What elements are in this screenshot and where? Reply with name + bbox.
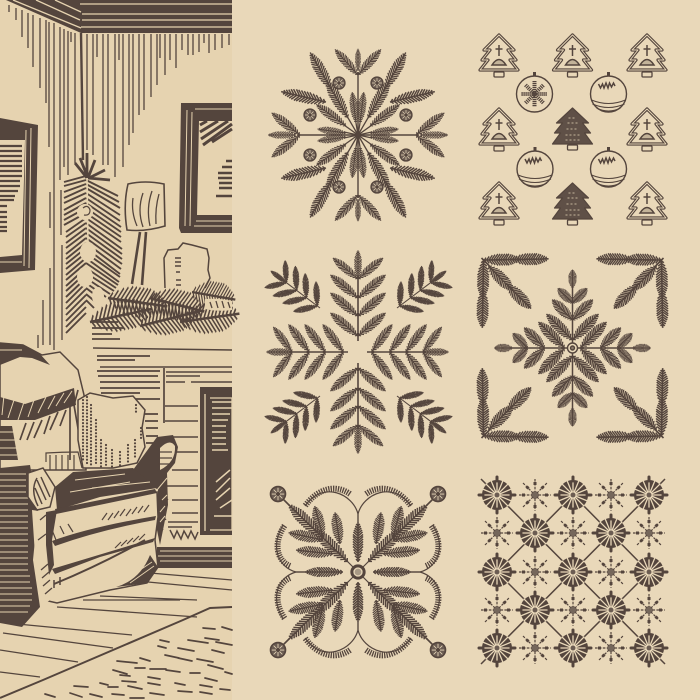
mantel and siding xyxy=(93,348,232,539)
star arms xyxy=(494,270,651,426)
panel: snowflake lattice pattern xyxy=(479,477,667,666)
panel: pine star with corner sprigs xyxy=(477,253,668,443)
mantel pine garland xyxy=(87,278,242,341)
vertical and horizontal arms xyxy=(268,47,448,223)
corner sprigs xyxy=(477,253,668,443)
ceiling cornice xyxy=(6,0,232,33)
panel: floral pine ornament xyxy=(270,486,446,658)
candle xyxy=(164,243,210,288)
upper left quadrant fronds xyxy=(280,50,360,137)
lamp xyxy=(125,182,165,285)
center flower xyxy=(351,565,365,579)
pillow xyxy=(78,393,145,468)
panel: eight-branch pine snowflake xyxy=(258,250,459,454)
panel: trees and baubles pattern xyxy=(480,35,666,225)
right picture frame xyxy=(179,103,232,233)
rug dashes xyxy=(45,627,232,698)
baseboard and floor xyxy=(0,547,232,698)
fireplace xyxy=(200,387,232,535)
front left arm xyxy=(0,465,40,627)
right arm xyxy=(133,435,178,545)
panel: snowflake with flowers xyxy=(268,47,448,223)
armchair xyxy=(0,343,178,627)
wall stripes xyxy=(9,5,229,350)
arm scroll xyxy=(28,468,55,510)
vertical pine garland xyxy=(64,153,122,333)
left picture frame xyxy=(0,118,38,273)
seat xyxy=(55,468,157,510)
front cushions xyxy=(40,492,158,603)
panel: cozy living room engraving xyxy=(0,0,242,700)
chair back xyxy=(0,343,86,470)
